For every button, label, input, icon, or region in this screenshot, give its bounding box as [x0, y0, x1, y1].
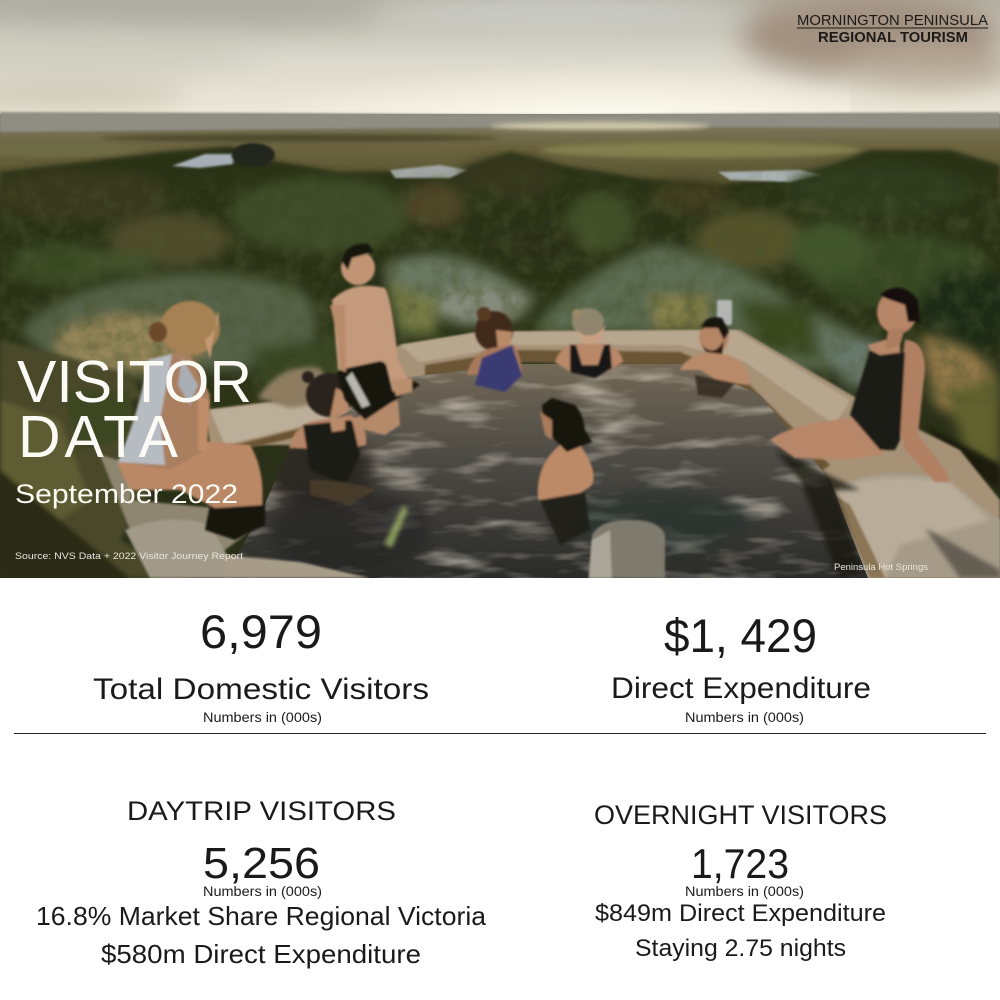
foreground grasses, left: [0, 340, 260, 578]
foliage: mid-ground bushes: [0, 156, 1000, 350]
stat: direct expenditure: $1, 429: [664, 609, 817, 662]
person: seated man, dark shorts: [330, 244, 420, 435]
dark soil, right of rim: [925, 425, 1000, 490]
panel: overnight visitors: Numbers in (000s): [685, 884, 804, 899]
stat: total domestic visitors: Total Domestic Visitors: [93, 673, 429, 706]
title: Visitor Data September 2022: September 2022: [15, 479, 238, 509]
stone edge shadow, right side: [775, 450, 862, 578]
sky with clouds: [0, 0, 1000, 125]
panel: daytrip visitors: Numbers in (000s): [203, 884, 322, 899]
source note: Source: NVS Data + 2022 Visitor Journey Report: [15, 551, 243, 562]
foliage: tree line: [0, 144, 1000, 204]
person: woman seated left, patterned swimsuit: [118, 301, 265, 540]
panel: overnight visitors: 1,723: [691, 840, 789, 887]
foreground rocks, lower left: [100, 455, 370, 578]
hero photo: hot springs at sunset: [0, 0, 1000, 580]
lens flare: [384, 506, 408, 548]
buildings on the horizon: [172, 143, 822, 182]
photo base tone: [0, 204, 1000, 578]
distant land and fields: [0, 112, 1000, 204]
title: Visitor Data September 2022: DATA: [18, 404, 179, 470]
panel: overnight visitors: OVERNIGHT VISITORS: [594, 800, 887, 830]
logo: Mornington Peninsula Regional Tourism: [797, 12, 988, 46]
panel: daytrip visitors: DAYTRIP VISITORS: [127, 796, 396, 826]
person: blonde woman in water: [555, 308, 623, 378]
stat: direct expenditure: [611, 609, 871, 725]
title: Visitor Data September 2022: [15, 349, 252, 509]
logo: Mornington Peninsula Regional Tourism: MORNINGTON PENINSULA: [797, 12, 988, 29]
person: woman in water, black swimsuit: [289, 371, 375, 505]
stat: total domestic visitors: Numbers in (000s): [203, 710, 322, 725]
stat: direct expenditure: Numbers in (000s): [685, 710, 804, 725]
panel: overnight visitors: Staying 2.75 nights: [635, 935, 846, 962]
logo: Mornington Peninsula Regional Tourism: REGIONAL TOURISM: [818, 30, 968, 46]
photo credit: Peninsula Hot Springs: [834, 562, 929, 572]
stat: total domestic visitors: 6,979: [200, 605, 322, 658]
panel: daytrip visitors: [36, 796, 487, 969]
person: man in water, back to camera: [538, 398, 594, 545]
title: Visitor Data September 2022: VISITOR: [17, 349, 252, 415]
panel: daytrip visitors: $580m Direct Expenditure: [101, 939, 421, 969]
panel: daytrip visitors: 16.8% Market Share Regional Victoria: [36, 901, 487, 931]
stat: total domestic visitors: [93, 605, 429, 725]
person: bearded man in water: [680, 317, 750, 398]
panel: daytrip visitors: 5,256: [203, 839, 320, 888]
stat: direct expenditure: Direct Expenditure: [611, 672, 871, 705]
foliage: silver-green shrubs near pool: [20, 245, 1000, 470]
post in foreground: [589, 520, 665, 578]
person: woman in purple swimsuit: [467, 307, 522, 392]
pool water with ripples: [220, 360, 880, 580]
panel: overnight visitors: [594, 800, 887, 962]
panel: overnight visitors: $849m Direct Expenditure: [595, 900, 886, 927]
person: woman seated right, black swimsuit: [770, 288, 950, 482]
stone pool rim: [205, 300, 1000, 578]
